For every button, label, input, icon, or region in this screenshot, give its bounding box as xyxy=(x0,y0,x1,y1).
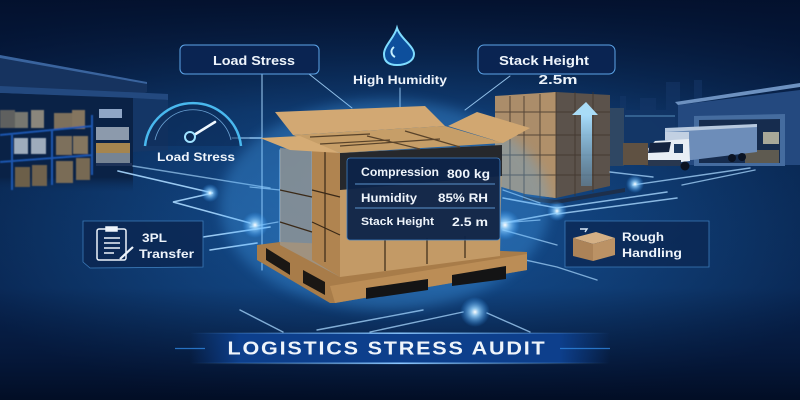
callout: stack height xyxy=(478,45,615,87)
callout: 3PL transfer: Transfer xyxy=(139,247,194,261)
data panel: 85% RH xyxy=(438,193,488,205)
gauge: load stress xyxy=(145,103,241,164)
wooden pallet xyxy=(257,242,527,303)
icon: water drop with high humidity label: High Humidity xyxy=(353,75,448,87)
title banner xyxy=(175,332,610,364)
front carton face xyxy=(340,145,502,277)
right flap xyxy=(448,112,530,143)
inner carton tops xyxy=(293,126,503,153)
stacked pallets xyxy=(495,92,648,204)
row: compression: Compression xyxy=(361,167,439,179)
left flap xyxy=(260,136,340,153)
warehouse shelving xyxy=(0,110,93,190)
callout: rough handling xyxy=(565,221,709,267)
glow points xyxy=(201,100,644,327)
data panel: 2.5 m xyxy=(452,217,488,229)
central pallet box xyxy=(257,106,530,303)
data panel xyxy=(347,158,500,240)
icon: tilted box xyxy=(573,229,615,261)
translucent left box side xyxy=(280,148,340,277)
callout: rough handling: Rough xyxy=(622,230,664,244)
data panel: 800 kg xyxy=(447,167,490,181)
left warehouse xyxy=(0,55,168,192)
callout: 3PL transfer: 3PL xyxy=(142,231,167,245)
icon: water drop with high humidity label xyxy=(353,28,448,87)
row: stack height: Stack Height xyxy=(361,216,434,228)
carton seams xyxy=(280,151,465,271)
floor light lines xyxy=(118,74,755,332)
row: humidity: Humidity xyxy=(361,193,418,205)
back flap xyxy=(275,106,445,135)
icon: upward arrow xyxy=(572,102,598,186)
callout: 3PL transfer xyxy=(83,221,203,268)
title banner: LOGISTICS STRESS AUDIT xyxy=(228,338,546,358)
callout: load stress xyxy=(180,45,319,74)
callout: stack height: Stack Height xyxy=(499,54,590,68)
right skyline and warehouse xyxy=(610,80,800,166)
callout: stack height: 2.5m xyxy=(538,72,578,87)
gauge: load stress: Load Stress xyxy=(157,152,235,164)
delivery truck xyxy=(645,124,757,170)
callout: load stress: Load Stress xyxy=(213,54,295,68)
callout: rough handling: Handling xyxy=(622,246,682,260)
icon: clipboard xyxy=(97,227,133,260)
